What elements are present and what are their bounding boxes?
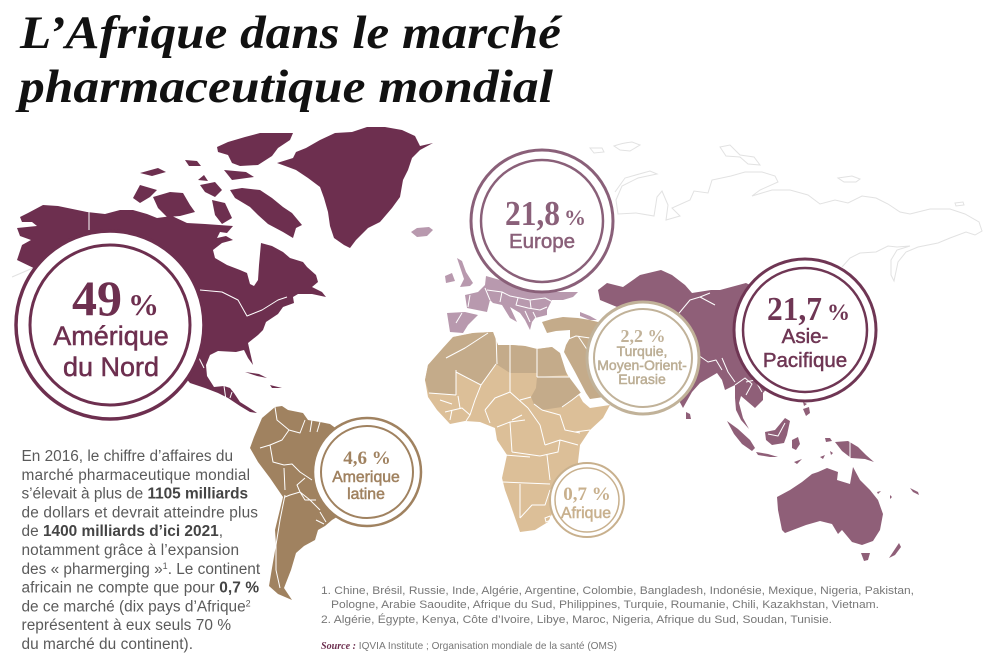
Borneo bbox=[765, 418, 790, 445]
map: Europe bbox=[445, 258, 597, 333]
New Guinea bbox=[825, 438, 874, 462]
circle: Amérique latine: 4,6 % bbox=[343, 448, 391, 469]
national borders bbox=[429, 333, 590, 518]
Alaska, Canada, USA, Mexico, Central America bbox=[17, 205, 326, 413]
circle: Afrique: 0,7 % bbox=[563, 484, 611, 505]
body text: du marché du continent). bbox=[22, 636, 193, 653]
body text: 1 bbox=[163, 561, 168, 571]
map: North America bbox=[17, 127, 433, 413]
source: Source : IQVIA Institute ; Organisation mondiale de la santé (OMS) bbox=[321, 640, 617, 652]
map: Russia outline bbox=[12, 142, 982, 281]
title bbox=[15, 7, 563, 113]
circle: Asie-Pacifique: Asie- bbox=[782, 325, 828, 348]
circle: Turquie, Moyen-Orient, Eurasie: Eurasie bbox=[618, 371, 666, 387]
title: pharmaceutique mondial bbox=[15, 61, 553, 113]
map: South America bbox=[250, 406, 365, 600]
map: Turkey and Middle East bbox=[542, 317, 610, 399]
Sri Lanka bbox=[686, 412, 691, 419]
Sudan bbox=[531, 377, 581, 410]
circle: Turquie, Moyen-Orient, Eurasie: 2,2 % bbox=[620, 326, 666, 346]
circle: Amérique latine: Amerique bbox=[332, 469, 400, 486]
Philippines bbox=[803, 402, 810, 416]
map: Iceland bbox=[411, 227, 433, 237]
map: Africa bbox=[425, 332, 610, 532]
circle: Europe bbox=[471, 150, 613, 292]
Sumatra bbox=[727, 421, 755, 451]
circle: Europe: 21,8 bbox=[505, 194, 560, 233]
Greenland bbox=[277, 127, 433, 248]
footnotes: 2. Algérie, Égypte, Kenya, Côte d’Ivoire, Libye, Maroc, Nigeria, Afrique du Sud, Soudan, Tunisie. bbox=[321, 613, 832, 626]
circle: Turquie, Moyen-Orient, Eurasie: Turquie, bbox=[617, 343, 667, 359]
body text: de 1400 milliards d’ici 2021, bbox=[22, 523, 223, 540]
body text: En 2016, le chiffre d’affaires du bbox=[22, 448, 233, 465]
small islands bbox=[772, 451, 919, 499]
body text: africain ne compte que pour 0,7 % bbox=[22, 580, 259, 597]
body text: s’élevait à plus de 1105 milliards bbox=[22, 486, 248, 503]
body text: des « pharmerging » bbox=[22, 561, 163, 578]
circle: Amérique du Nord: 49 bbox=[72, 270, 122, 326]
circle: Amérique latine bbox=[313, 418, 421, 526]
body text: de ce marché (dix pays d’Afrique bbox=[22, 598, 246, 615]
north African countries bbox=[425, 332, 567, 395]
footnotes: Pologne, Arabie Saoudite, Afrique du Sud, Philippines, Turquie, Roumanie, Chili, Kazakhstan, Vietnam. bbox=[331, 599, 879, 611]
body text: . Le continent bbox=[168, 561, 261, 578]
circle: Turquie, Moyen-Orient, Eurasie: Moyen-Orient- bbox=[597, 357, 687, 373]
body text: de dollars et devrait atteindre plus bbox=[22, 504, 258, 521]
circle: Amérique du Nord: du Nord bbox=[63, 352, 159, 382]
circle: Asie-Pacifique: 21,7 bbox=[767, 291, 822, 328]
circle: Amérique latine: latine bbox=[347, 486, 385, 503]
circle: Asie-Pacifique: Pacifique bbox=[763, 349, 847, 372]
circle: Afrique bbox=[550, 463, 624, 537]
body text: représentent à eux seuls 70 % bbox=[22, 617, 231, 634]
Java bbox=[756, 452, 778, 457]
mainland Asia bbox=[598, 270, 790, 429]
circle: Asie-Pacifique bbox=[734, 259, 876, 401]
footnotes: 1. Chine, Brésil, Russie, Inde, Algérie, Argentine, Colombie, Bangladesh, Indonésie, Mexique, Nigeria, Pakistan, bbox=[321, 585, 914, 597]
circle: Europe: Europe bbox=[509, 230, 575, 253]
circle: Europe: % bbox=[564, 205, 586, 230]
footnotes bbox=[321, 585, 914, 626]
circle: Amérique du Nord bbox=[16, 231, 204, 419]
body text: notamment grâce à l’expansion bbox=[22, 542, 239, 559]
Tasmania and New Zealand bbox=[861, 543, 901, 561]
circle: Asie-Pacifique: % bbox=[827, 300, 850, 325]
Australia bbox=[777, 467, 883, 545]
map: Asia borders bbox=[675, 293, 850, 458]
map: Asia-Pacific bbox=[598, 270, 919, 561]
circle: Turquie, Moyen-Orient, Eurasie bbox=[587, 302, 699, 414]
body text: 2 bbox=[246, 598, 251, 608]
body text bbox=[22, 448, 261, 653]
circle: Amérique du Nord: % bbox=[128, 287, 159, 322]
Arctic islands bbox=[217, 133, 293, 166]
map: North America borders bbox=[89, 212, 287, 400]
circle: Amérique du Nord: Amérique bbox=[53, 321, 169, 351]
body text: marché pharmaceutique mondial bbox=[22, 467, 250, 484]
title: L’Afrique dans le marché bbox=[19, 7, 563, 59]
Sulawesi bbox=[792, 437, 800, 450]
circle: Afrique: Afrique bbox=[561, 505, 611, 522]
